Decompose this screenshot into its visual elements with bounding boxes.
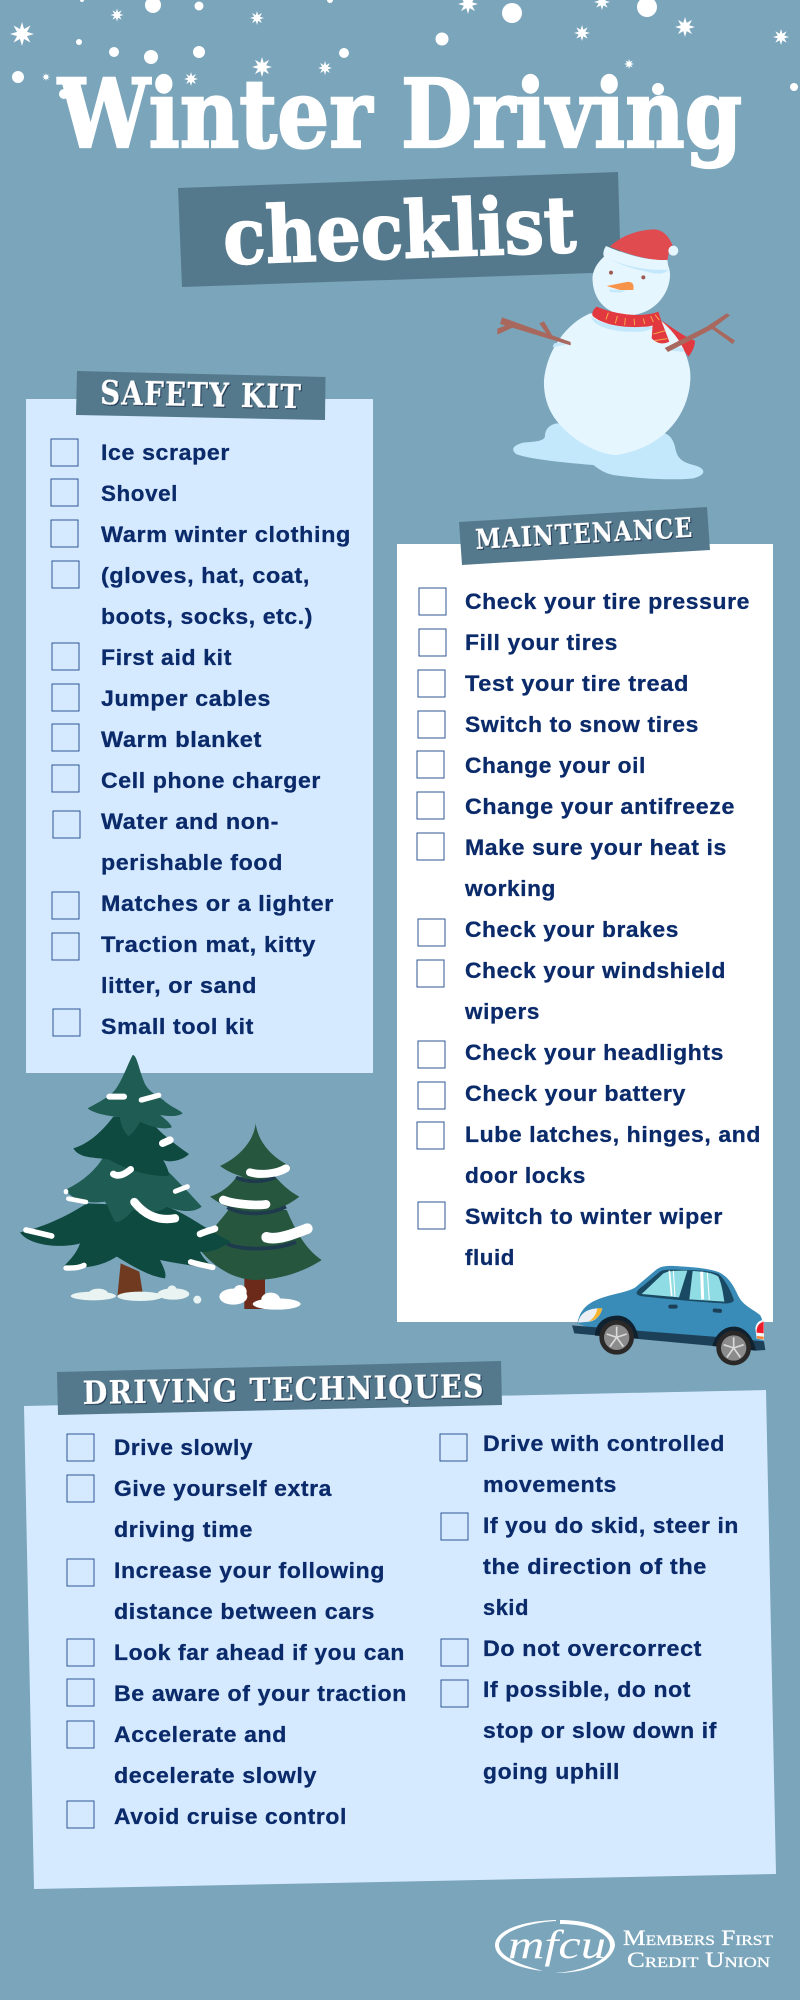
item: shovel [51, 479, 178, 506]
item: overcorrect [441, 1636, 702, 1666]
item: water and food: Water and non- [101, 809, 279, 834]
item: heat: Make sure your heat is [465, 835, 727, 860]
item: battery [418, 1081, 686, 1109]
item: accelerate: decelerate slowly [114, 1763, 317, 1788]
heading: maintenance [459, 507, 710, 565]
item: controlled movements [440, 1431, 725, 1497]
item: shovel: Shovel [101, 481, 178, 506]
item: following distance: Increase your following [114, 1558, 385, 1583]
item: warm blanket [52, 724, 262, 752]
panel: safety kit [26, 371, 373, 1073]
item: windshield wipers: Check your windshield [465, 958, 726, 983]
item: skid: the direction of the [483, 1554, 707, 1579]
item: extra driving time: Give yourself extra [114, 1476, 332, 1501]
item: accelerate: Accelerate and [114, 1722, 287, 1747]
item: matches or a lighter [52, 891, 334, 919]
item: battery: Check your battery [465, 1081, 686, 1106]
item: uphill: stop or slow down if [483, 1718, 717, 1743]
item: warm blanket: Warm blanket [101, 727, 262, 752]
item: fill tires [419, 629, 618, 656]
item: jumper cables [52, 684, 271, 711]
item: following distance: distance between cars [114, 1599, 375, 1624]
item: ice scraper: Ice scraper [101, 440, 230, 465]
item: gloves, hat, coat, boots, socks: boots, socks, etc.) [101, 604, 313, 629]
item: heat [417, 833, 727, 901]
item: jumper cables: Jumper cables [101, 686, 271, 711]
panel background [397, 544, 773, 1322]
item: matches or a lighter: Matches or a lighter [101, 891, 334, 916]
item: cell phone charger: Cell phone charger [101, 768, 321, 793]
item: brakes [418, 917, 679, 946]
panel background [26, 399, 373, 1073]
item: overcorrect: Do not overcorrect [483, 1636, 702, 1661]
item: water and food: perishable food [101, 850, 283, 875]
item: look far ahead: Look far ahead if you can [114, 1640, 405, 1665]
heading: maintenance: MAINTENANCE [475, 513, 694, 556]
illustration: snowman [497, 229, 735, 479]
item: water and food [53, 809, 283, 875]
item: windshield wipers: wipers [464, 999, 540, 1024]
item: brakes: Check your brakes [465, 917, 679, 942]
subtitle banner: checklist [221, 180, 577, 283]
logo wordmark: Members First [623, 1925, 773, 1950]
item: small tool kit [53, 1009, 254, 1039]
item: headlights: Check your headlights [465, 1040, 724, 1065]
item: gloves, hat, coat, boots, socks: (gloves, hat, coat, [101, 563, 310, 588]
item: controlled movements: Drive with controlled [483, 1431, 725, 1456]
panel background [24, 1390, 776, 1889]
heading: driving techniques: DRIVING TECHNIQUES [82, 1367, 485, 1412]
item: skid: skid [483, 1595, 529, 1620]
item: latches, hinges, locks [417, 1122, 761, 1188]
item: uphill: going uphill [483, 1759, 620, 1784]
panel: driving techniques [24, 1361, 776, 1889]
item: controlled movements: movements [483, 1472, 617, 1497]
item: change oil: Change your oil [465, 753, 646, 778]
item: drive slowly: Drive slowly [114, 1435, 253, 1460]
item: skid [441, 1513, 739, 1620]
item: extra driving time: driving time [114, 1517, 253, 1542]
item: drive slowly [67, 1434, 253, 1461]
item: latches, hinges, locks: door locks [465, 1163, 586, 1188]
item: traction mat [52, 932, 316, 998]
item: extra driving time [67, 1475, 332, 1542]
item: heat: working [464, 876, 556, 901]
logo: members first credit union [495, 1920, 773, 1973]
item: warm winter clothing: Warm winter clothing [101, 522, 351, 547]
item: uphill [441, 1677, 717, 1784]
item: traction mat: Traction mat, kitty [101, 932, 316, 957]
item: uphill: If possible, do not [483, 1677, 691, 1702]
item: windshield wipers [417, 958, 726, 1024]
item: traction: Be aware of your traction [114, 1681, 407, 1706]
item: ice scraper [51, 439, 230, 466]
item: gloves, hat, coat, boots, socks [52, 561, 313, 629]
item: wiper fluid: Switch to winter wiper [465, 1204, 723, 1229]
item: first aid kit [52, 643, 232, 670]
item: wiper fluid [418, 1202, 723, 1270]
item: antifreeze: Change your antifreeze [465, 794, 735, 819]
item: tire pressure: Check your tire pressure [465, 589, 750, 614]
falling snow [10, 0, 798, 99]
item: following distance [67, 1558, 385, 1624]
item: small tool kit: Small tool kit [101, 1014, 254, 1039]
illustration: snowy pine trees [20, 1055, 322, 1310]
item: skid: If you do skid, steer in [483, 1513, 739, 1538]
item: tire tread: Test your tire tread [465, 671, 689, 696]
item: wiper fluid: fluid [465, 1245, 515, 1270]
item: cell phone charger [52, 765, 321, 793]
heading: safety kit: SAFETY KIT [100, 373, 303, 416]
panel: maintenance [397, 507, 773, 1322]
item: first aid kit: First aid kit [101, 645, 232, 670]
item: traction mat: litter, or sand [101, 973, 257, 998]
logo mark: mfcu [508, 1922, 606, 1967]
logo wordmark line two: Credit Union [627, 1947, 770, 1972]
item: cruise control: Avoid cruise control [114, 1804, 347, 1829]
item: accelerate [67, 1721, 317, 1788]
item: snow tires: Switch to snow tires [465, 712, 699, 737]
logo mark [495, 1920, 615, 1973]
item: latches, hinges, locks: Lube latches, hinges, and [465, 1122, 761, 1147]
item: fill tires: Fill your tires [465, 630, 618, 655]
illustration: blue car [572, 1266, 765, 1365]
